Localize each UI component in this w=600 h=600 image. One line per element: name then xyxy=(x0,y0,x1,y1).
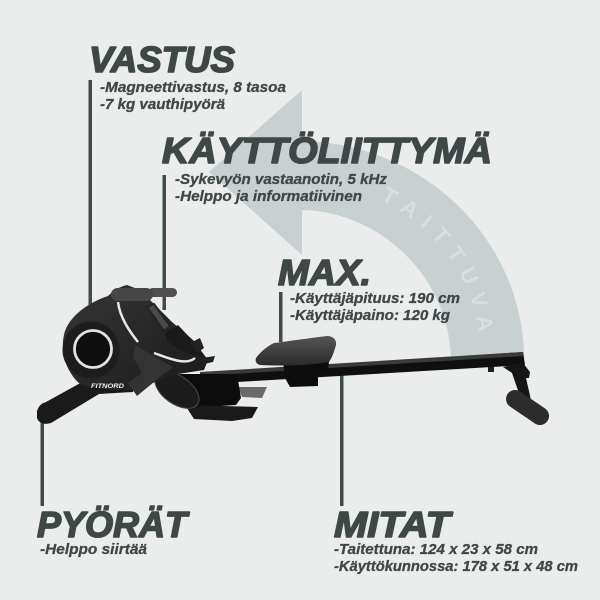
heading: max: MAX. xyxy=(278,252,371,293)
text: mitat details: -Taitettuna: 124 x 23 x 58 cm xyxy=(334,542,538,558)
heading: kayttoliittyma: KÄYTTÖLIITTYMÄ xyxy=(162,130,492,171)
heading: mitat: MITAT xyxy=(334,504,453,545)
rear leg and foot xyxy=(488,363,540,416)
seat carriage xyxy=(283,361,329,387)
leader line: vastus xyxy=(88,80,92,305)
leader line: max xyxy=(279,292,282,342)
text: vastus details xyxy=(100,80,286,113)
handle xyxy=(111,288,177,301)
front foot bar xyxy=(37,381,135,424)
arrow label: TAITTUVA xyxy=(385,186,492,332)
text: vastus details: -Magneettivastus, 8 tasoa xyxy=(100,80,286,96)
block: kayttoliittyma xyxy=(162,130,492,205)
white light stripe xyxy=(118,302,138,342)
heading: vastus: VASTUS xyxy=(89,39,235,80)
lower light stripe xyxy=(154,353,195,361)
block: vastus xyxy=(89,39,286,113)
block: pyorat xyxy=(37,504,190,558)
arrow: folding direction xyxy=(209,90,524,356)
text: kayttoliittyma details xyxy=(175,172,388,205)
leader line: mitat xyxy=(340,375,344,506)
main rail xyxy=(190,352,525,384)
text: vastus details: -7 kg vauthipyörä xyxy=(100,97,225,113)
console knob xyxy=(190,338,215,364)
text: mitat details xyxy=(334,542,578,575)
console controls xyxy=(165,325,204,358)
flywheel housing xyxy=(63,285,208,390)
block: mitat xyxy=(334,504,578,575)
text: max details: -Käyttäjäpaino: 120 kg xyxy=(290,308,450,324)
leader line: pyorat xyxy=(40,418,44,506)
block: max xyxy=(278,252,460,324)
front bracket xyxy=(168,374,241,408)
brand logo: FITNORD xyxy=(91,383,124,390)
console display xyxy=(147,304,170,331)
flywheel pulley cover xyxy=(148,364,206,416)
hanging strap xyxy=(128,345,173,396)
text: kayttoliittyma details: -Sykevyön vastaanotin, 5 kHz xyxy=(175,172,388,188)
text: mitat details: -Käyttökunnossa: 178 x 51 x 48 cm xyxy=(334,559,578,575)
text: pyorat details: -Helppo siirtää xyxy=(40,542,147,558)
seat xyxy=(256,336,336,366)
leader line: kayttoliittyma xyxy=(162,175,166,310)
rear back footplate xyxy=(238,387,267,398)
heading: pyorat: PYÖRÄT xyxy=(37,504,190,545)
text: max details xyxy=(290,291,460,324)
front footplate xyxy=(185,405,258,421)
flywheel disc and ring xyxy=(62,322,120,378)
rowing machine xyxy=(37,285,540,424)
text: kayttoliittyma details: -Helppo ja informatiivinen xyxy=(175,189,362,205)
text: max details: -Käyttäjäpituus: 190 cm xyxy=(290,291,460,307)
